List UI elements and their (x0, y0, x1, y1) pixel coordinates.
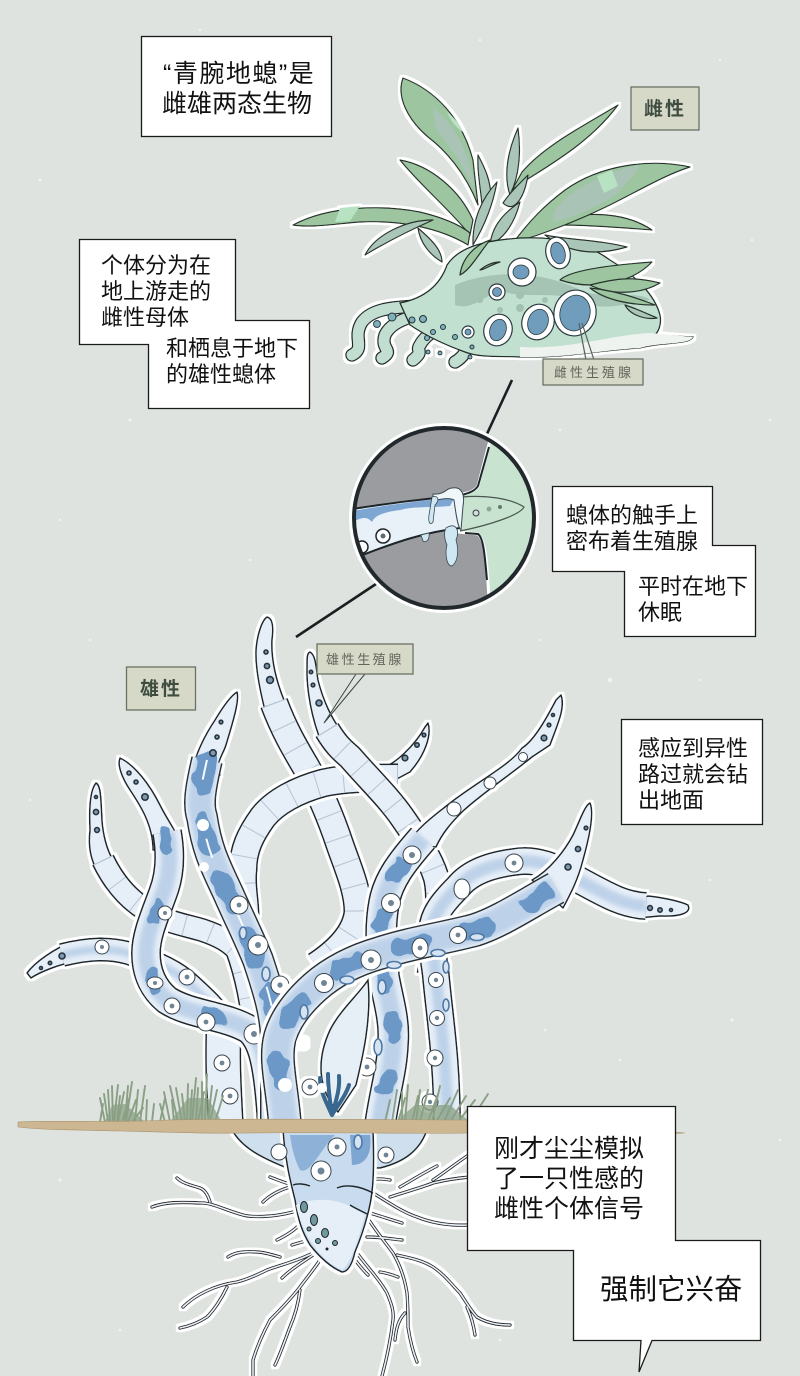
text box: male and female forms: 雌性母体 (101, 305, 189, 330)
tentacle: centre plain (256, 617, 358, 966)
central bud (321, 980, 369, 1112)
text box: 青腕地螅 dimorphism: 雌雄两态生物 (162, 90, 312, 118)
text box: male and female forms (80, 240, 310, 408)
belly (520, 333, 693, 357)
text box: 青腕地螅 dimorphism: “青腕地螅”是 (163, 60, 315, 88)
zoom connector line: upper (486, 380, 512, 436)
illustration: male creature (27, 617, 689, 1128)
tentacle: left blue loop (119, 758, 272, 1125)
text box: 青腕地螅 dimorphism (142, 36, 332, 136)
tag: female (631, 87, 699, 130)
text box: male and female forms: 的雄性螅体 (166, 362, 276, 387)
tentacle: gonad-labelled (307, 652, 438, 975)
text box: tentacles and dormancy: 密布着生殖腺 (566, 529, 698, 554)
male underground body (232, 1130, 427, 1272)
spots (477, 291, 548, 313)
tentacle: right long (358, 695, 562, 1125)
tag: male gonad: 雄性生殖腺 (326, 652, 404, 667)
grass tufts (100, 1074, 488, 1122)
leaves (293, 78, 690, 262)
callout line: female gonad (579, 323, 594, 360)
text box: male and female forms: 和栖息于地下 (166, 336, 298, 361)
label: female gonad: 雌性生殖腺 (554, 365, 634, 380)
small flower sprout (317, 1074, 349, 1115)
label: female gonad (543, 359, 643, 385)
female gonads (462, 234, 601, 350)
text box: sensing the opposite sex: 出地面 (638, 788, 704, 813)
text box: forcing excitement with speech tail: 了一只性感的 (494, 1165, 644, 1193)
tentacle: left low (27, 940, 224, 1023)
small tentacles (352, 305, 478, 362)
male roots (152, 1154, 510, 1376)
text box: tentacles and dormancy (552, 486, 756, 636)
underground bulge (232, 1130, 427, 1168)
slime (433, 488, 464, 530)
female tissue (458, 442, 532, 595)
text box: male and female forms: 个体分为在 (101, 253, 211, 278)
text box: sensing the opposite sex (622, 720, 762, 824)
body (400, 238, 693, 357)
tag: male (126, 667, 196, 710)
male tentacle (356, 498, 460, 556)
tag: male gonad (317, 644, 413, 723)
tag: male: 雄性 (140, 678, 182, 700)
text box: tentacles and dormancy: 平时在地下 (638, 574, 748, 599)
illustration: female creature (293, 78, 693, 362)
right leaves (460, 235, 660, 318)
head features (271, 1135, 394, 1250)
tentacle: foreground wide blue (278, 803, 592, 1125)
tentacle: far left plain (89, 783, 254, 1030)
text box: tentacles and dormancy: 休眠 (638, 600, 682, 625)
tentacle: right arch (422, 854, 689, 1125)
text box: forcing excitement with speech tail: 刚才尘尘模拟 (494, 1135, 644, 1163)
tentacle dots (374, 313, 474, 359)
body shading (455, 274, 650, 307)
text box: forcing excitement with speech tail: 强制它兴奋 (600, 1274, 743, 1306)
text box: sensing the opposite sex: 感应到异性 (638, 736, 748, 761)
text box: forcing excitement with speech tail: 雌性个体信号 (494, 1195, 644, 1223)
text box: forcing excitement with speech tail (468, 1106, 760, 1372)
tentacle tip inside female (460, 496, 524, 531)
zoom connector line: lower (296, 582, 379, 637)
ground strip (18, 1119, 685, 1134)
magnified detail circle (345, 423, 540, 615)
tentacle: central left blue (191, 692, 289, 1125)
text box: sensing the opposite sex: 路过就会钻 (638, 762, 748, 787)
tentacle: upper arch (242, 723, 429, 915)
text box: male and female forms: 地上游走的 (101, 279, 211, 304)
head shading (296, 1200, 365, 1270)
head (283, 1130, 374, 1272)
tag: female: 雌性 (644, 98, 686, 120)
text box: tentacles and dormancy: 螅体的触手上 (566, 503, 698, 528)
tentacle: lower left stub (214, 1020, 238, 1128)
